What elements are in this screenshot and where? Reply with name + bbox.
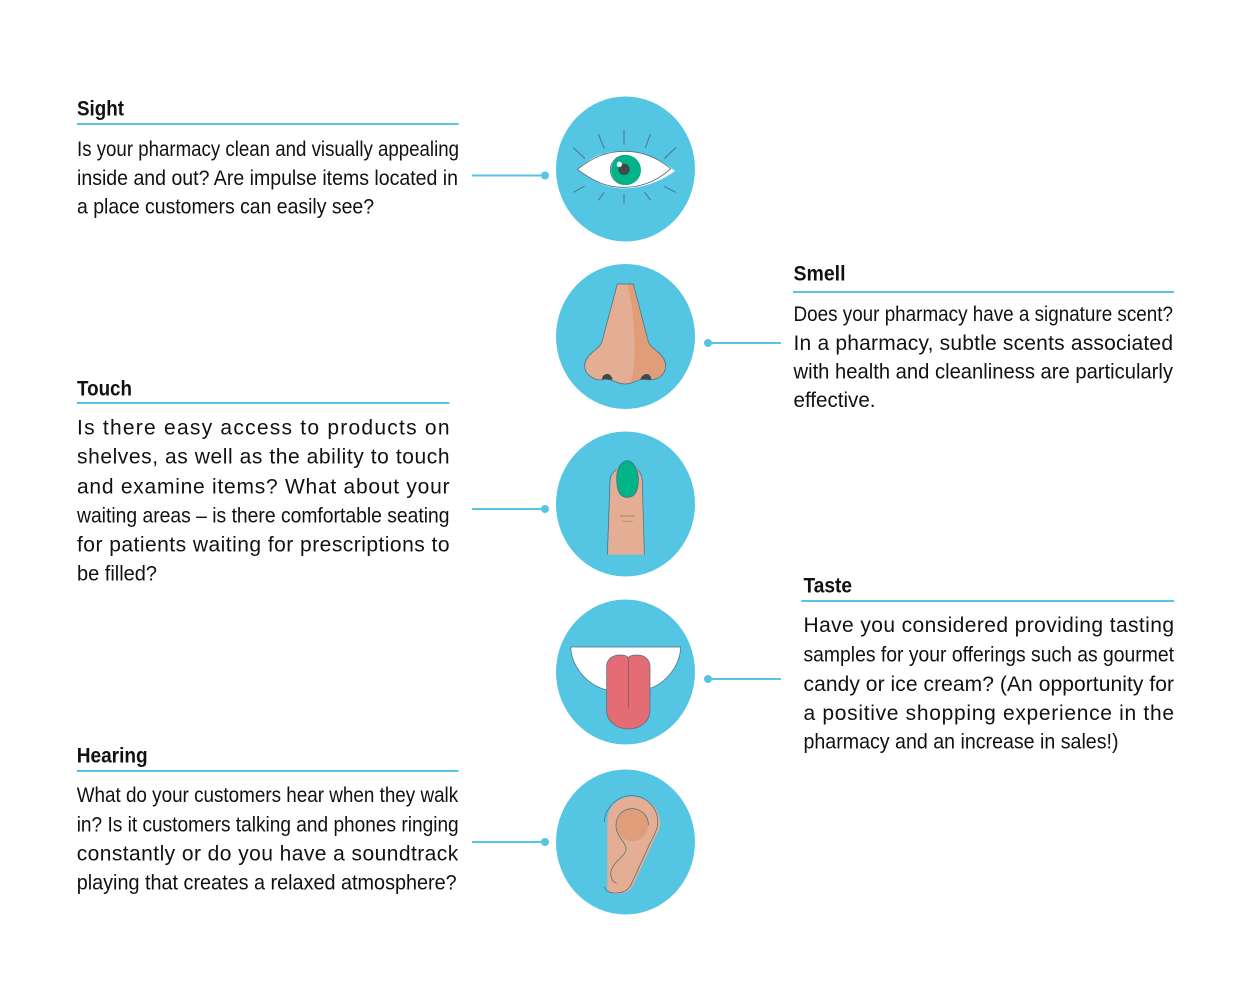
heading: Hearing: Hearing — [77, 744, 148, 767]
text block: hearing: What do your customers hear when they walk — [77, 784, 459, 807]
heading rule — [77, 770, 458, 772]
connector: touch — [472, 505, 549, 513]
icon: nose — [556, 264, 695, 409]
connector: sight — [472, 172, 549, 180]
panel: taste — [801, 574, 1174, 754]
icon: eye — [556, 96, 695, 242]
connector: hearing — [472, 838, 549, 846]
heading: Touch: Touch — [77, 377, 132, 400]
heading: Sight: Sight — [77, 97, 124, 120]
text block: hearing — [77, 784, 459, 894]
text block: taste: Have you considered providing tasting — [804, 614, 1174, 637]
heading rule — [77, 123, 458, 125]
panel: smell — [793, 262, 1174, 412]
heading rule — [77, 402, 450, 404]
text block: sight: a place customers can easily see? — [77, 195, 374, 218]
icon: tongue — [556, 600, 695, 744]
connector: taste — [704, 675, 781, 683]
text block: touch — [76, 416, 450, 585]
text block: taste: candy or ice cream? (An opportunity for — [804, 673, 1174, 696]
panel: hearing — [77, 744, 459, 894]
text block: smell: In a pharmacy, subtle scents associated — [794, 332, 1173, 355]
panel: touch — [76, 377, 450, 585]
text block: sight: inside and out? Are impulse items located in — [77, 167, 458, 190]
text block: touch: Is there easy access to products on — [77, 416, 450, 439]
connector: smell — [704, 339, 781, 347]
text block: touch: for patients waiting for prescriptions to — [77, 534, 450, 557]
text block: hearing: playing that creates a relaxed atmosphere? — [77, 871, 457, 894]
text block: smell — [793, 303, 1173, 412]
text block: taste: a positive shopping experience in the — [804, 702, 1174, 725]
text block: taste: samples for your offerings such as gourmet — [804, 644, 1174, 667]
icon: finger — [556, 432, 695, 576]
text block: hearing: in? Is it customers talking and phones ringing — [77, 814, 459, 837]
text block: smell: with health and cleanliness are particularly — [793, 360, 1173, 383]
text block: taste: pharmacy and an increase in sales!) — [804, 731, 1118, 754]
text block: touch: shelves, as well as the ability to touch — [77, 446, 450, 469]
text block: touch: be filled? — [77, 562, 157, 585]
heading: Smell: Smell — [794, 262, 846, 285]
text block: sight: Is your pharmacy clean and visually appealing — [77, 138, 459, 161]
heading: Taste: Taste — [804, 574, 852, 597]
panel: sight — [77, 97, 459, 218]
icon: ear — [556, 770, 695, 914]
text block: hearing: constantly or do you have a soundtrack — [77, 842, 459, 865]
text block: taste — [804, 614, 1174, 754]
text block: touch: waiting areas – is there comfortable seating — [76, 505, 450, 528]
text block: smell: effective. — [794, 389, 876, 412]
text block: smell: Does your pharmacy have a signature scent? — [794, 303, 1173, 326]
text block: touch: and examine items? What about your — [77, 475, 450, 498]
heading rule — [793, 291, 1174, 293]
text block: sight — [77, 138, 459, 218]
heading rule — [801, 600, 1174, 602]
